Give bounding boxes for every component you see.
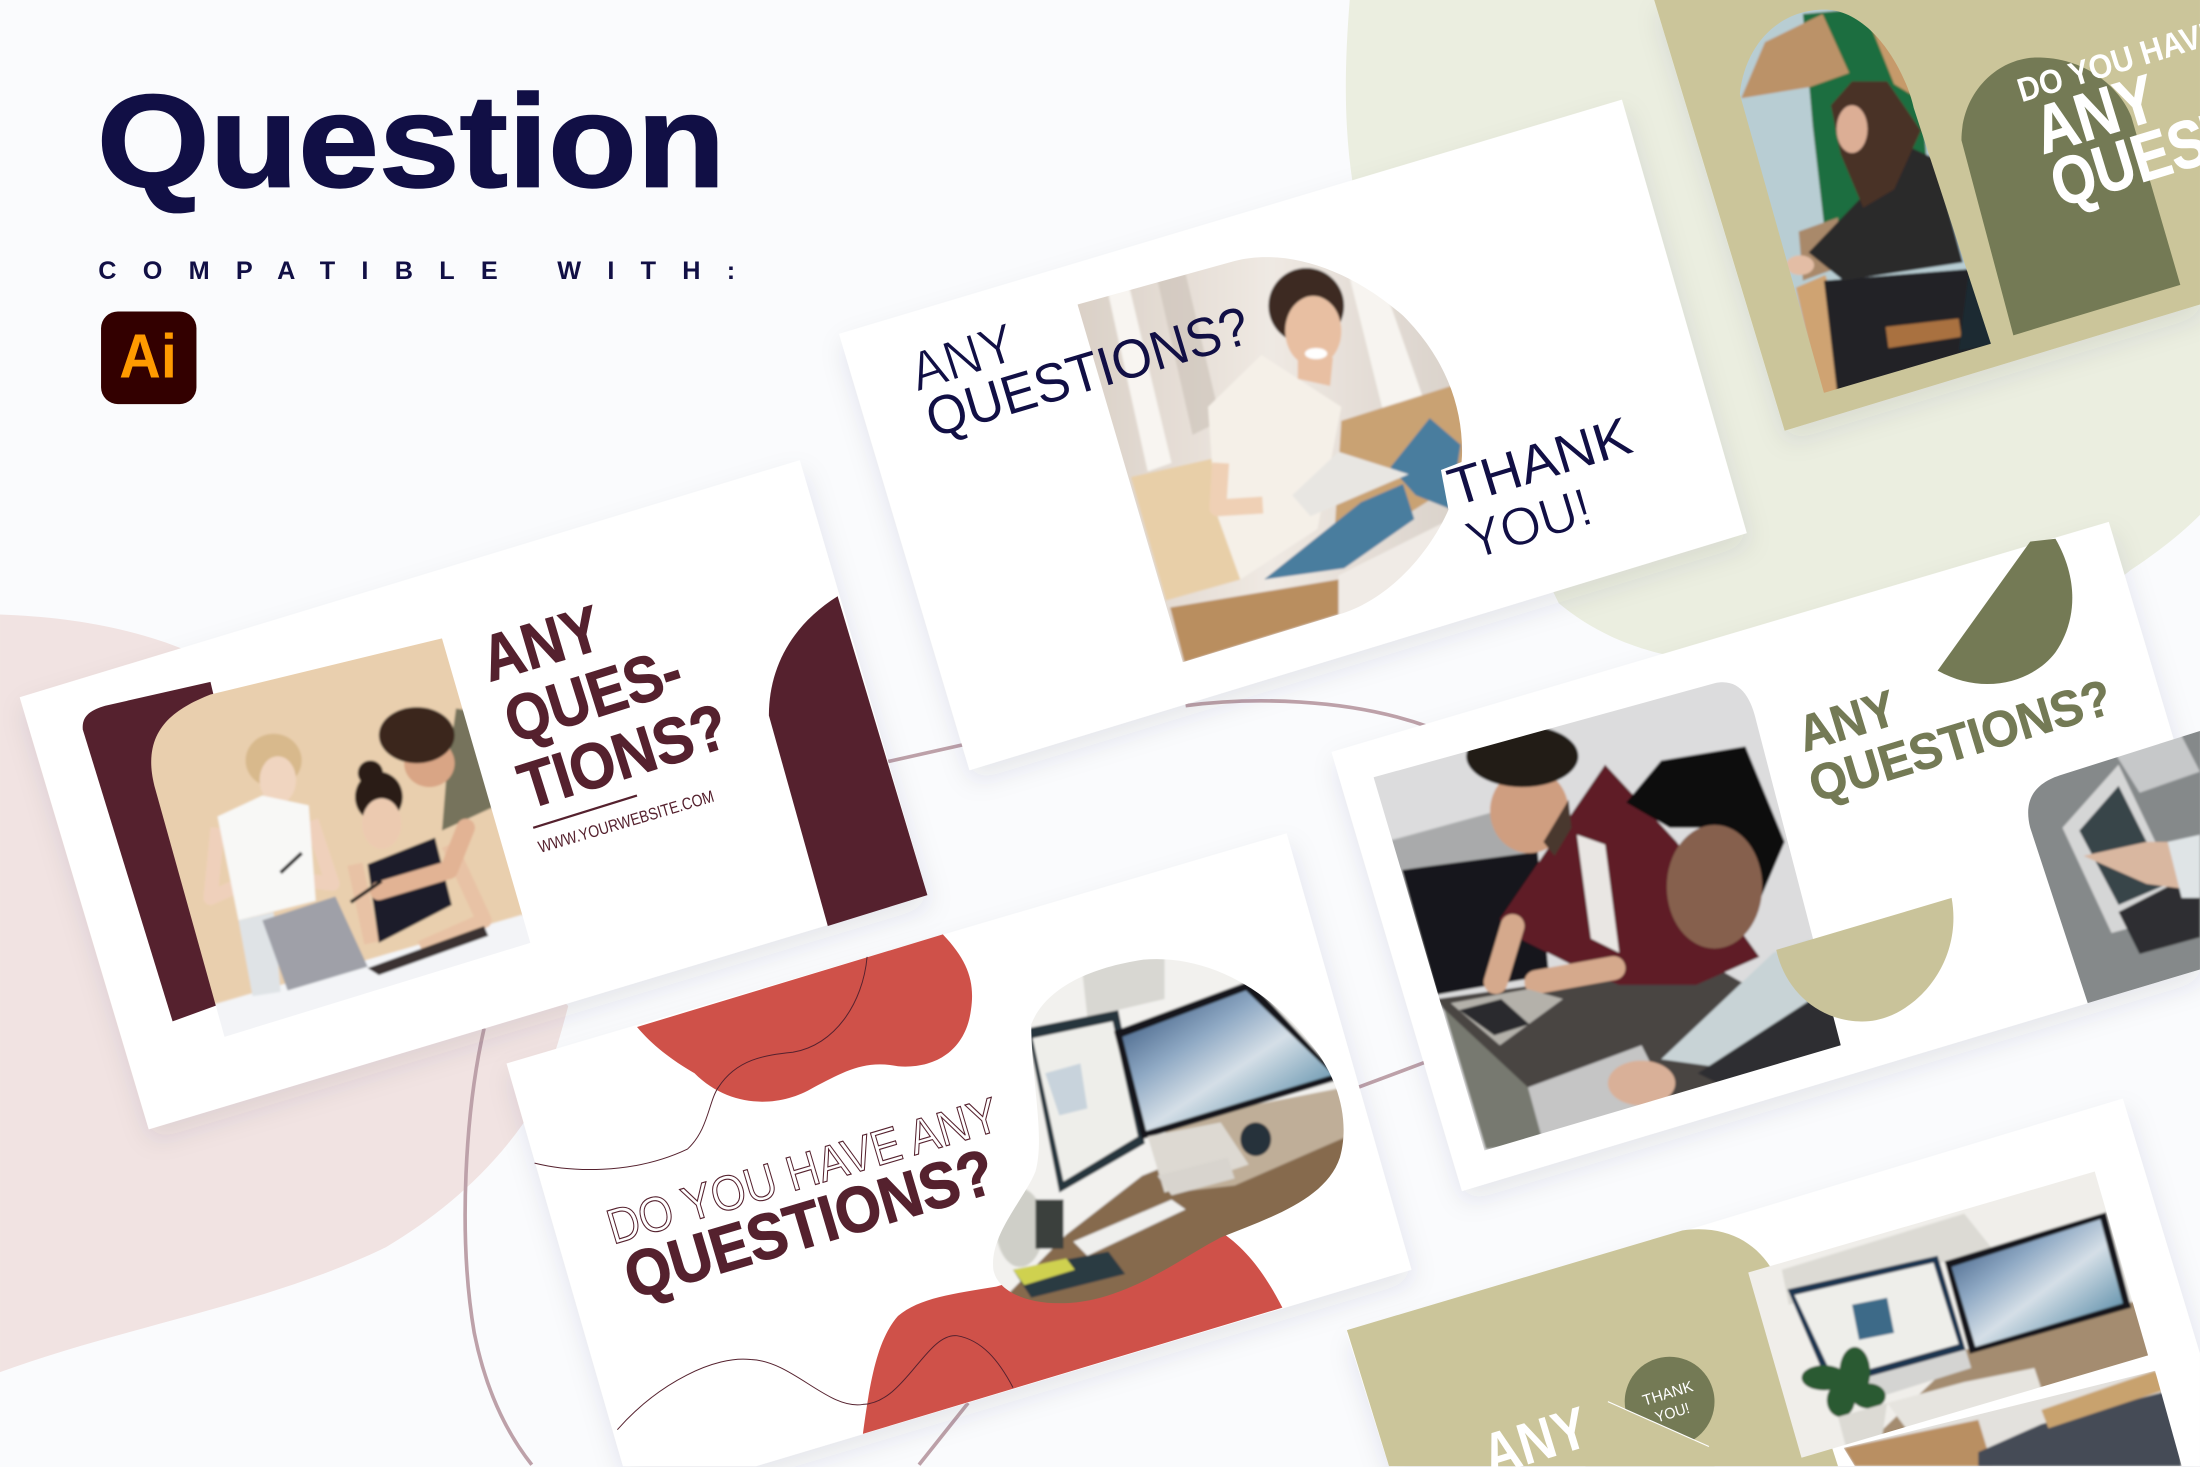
olive half circle: [1938, 539, 2072, 684]
green thank you badge: THANK: [1641, 1378, 1696, 1410]
subtitle: compatible with: COMPATIBLE WITH:: [98, 257, 735, 285]
icon: Adobe Illustrator: [101, 311, 196, 404]
heading: do you have any questions: ANY: [2025, 61, 2165, 169]
white tab behind thank you: [1441, 460, 1473, 522]
green thank you badge: YOU!: [1653, 1400, 1692, 1426]
panel: beige and white slide bottom right: [1347, 1099, 2200, 1467]
heading: thank you: YOU!: [1459, 478, 1599, 571]
photo: woman with notebook on sofa: [1078, 257, 1462, 662]
heading: any questions: QUESTIONS?: [919, 294, 1256, 449]
heading: any questions: TIONS?: [510, 690, 737, 823]
heading: any questions: [473, 592, 737, 823]
left maroon arch: [83, 682, 281, 1021]
heading: any questions: ANY: [473, 592, 609, 695]
beige half circle: [1776, 898, 1953, 1022]
photo: laptop on wooden table: [1838, 1368, 2189, 1466]
background blob: pink: [0, 615, 568, 1372]
background blob: sage green: [1346, 0, 2200, 662]
photo: plant and two monitors: [1740, 1165, 2161, 1465]
heading: thank you: [1441, 407, 1638, 571]
heading: questions: QUESTIONS?: [616, 1135, 1003, 1313]
thin curved lines: [535, 957, 1013, 1430]
website text: WWW.YOURWEBSITE.COM: [536, 787, 716, 857]
underline: [533, 796, 637, 828]
heading: any questions: QUESTIONS?: [1802, 668, 2118, 813]
heading: thank you: THANK: [1441, 407, 1638, 518]
bottom red blob: [863, 1223, 1282, 1434]
photo: desk with two monitors: [993, 959, 1344, 1304]
panel: olive slide: [1331, 522, 2200, 1191]
beige rounded panel: [1347, 1229, 1838, 1466]
panel: maroon slide: [20, 460, 927, 1129]
heading: any questions: ANY: [902, 311, 1023, 403]
panel: navy slide: [839, 100, 1747, 770]
title: Question: [97, 68, 725, 215]
heading: any questions: ANY: [1791, 679, 1903, 763]
panel: beige slide top right: [1654, 0, 2200, 431]
panel: red slide: [507, 833, 1411, 1466]
right maroon arch: [769, 596, 927, 926]
photo: woman working at a cafe: [1733, 0, 1999, 400]
olive arch: [1961, 57, 2180, 335]
heading: do you have any (outlined): DO YOU HAVE ANY: [601, 1088, 1005, 1255]
photo: hand pointing at laptop: [2020, 723, 2200, 1010]
photo: two men laughing at laptops: [1361, 673, 1852, 1157]
photo: three colleagues at a laptop: [151, 638, 530, 1036]
heading: any questions: QUES-: [496, 634, 690, 757]
connecting curved line: [465, 701, 1428, 1465]
green thank you badge: [1585, 1357, 1715, 1466]
icon: Adobe Illustrator: Ai: [119, 322, 177, 391]
top red blob: [637, 934, 972, 1102]
